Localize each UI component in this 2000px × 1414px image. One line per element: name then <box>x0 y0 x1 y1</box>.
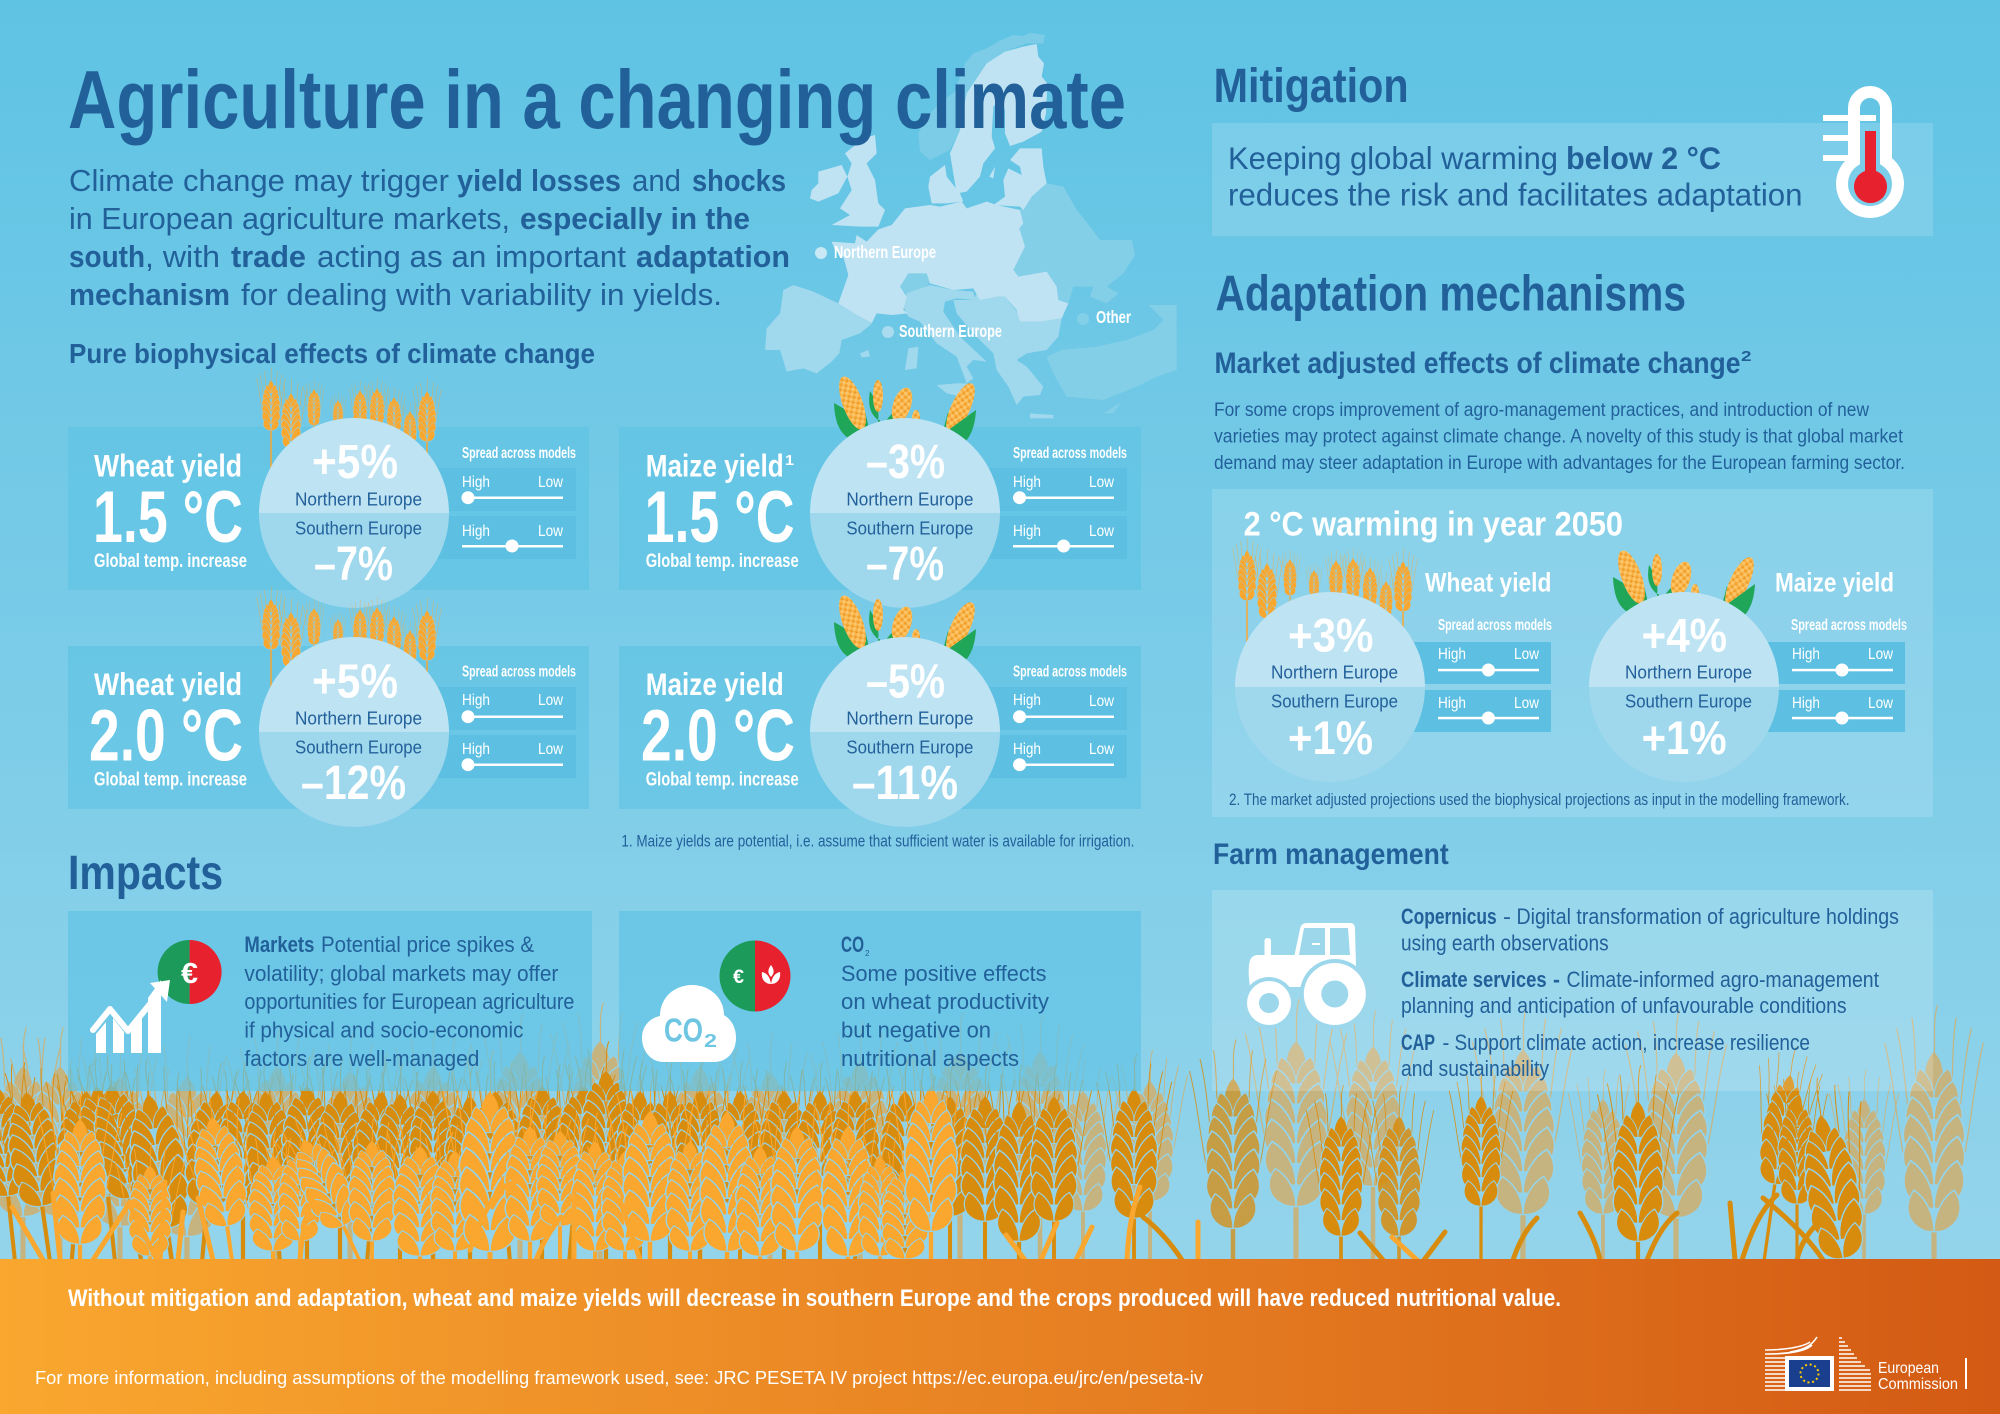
panel: wheat yield 1.5 C: Global temp. increase <box>94 551 247 572</box>
icon: rising chart arrow <box>93 980 170 1053</box>
spread across models <box>400 664 576 778</box>
European Commission logo: Commission <box>1878 1376 1958 1393</box>
icon: thermometer <box>1823 92 1898 212</box>
text: markets: factors are well-managed <box>244 1046 479 1071</box>
icon: wheat crown <box>1232 538 1418 690</box>
circle: north and south values <box>259 418 449 608</box>
intro paragraph: especially in the <box>520 201 750 236</box>
spread across models: wheat: Low <box>1514 646 1540 663</box>
map labels: Southern Europe <box>899 321 1002 341</box>
back row of pale wheat <box>0 999 1983 1414</box>
map: northern Europe <box>810 44 1068 323</box>
spread across models: High <box>462 474 490 491</box>
spread across models <box>950 664 1127 778</box>
spread across models: Low <box>1089 474 1115 491</box>
spread across models <box>950 445 1127 559</box>
circle: maize values: +1% <box>1642 712 1727 765</box>
heading: market adjusted effects: Market adjusted effects of climate change <box>1214 347 1740 380</box>
icon: tractor <box>1243 923 1370 1029</box>
intro paragraph: in European agriculture markets, <box>69 201 510 236</box>
spread across models: wheat: High <box>1438 646 1466 663</box>
heading: impacts: Impacts <box>68 847 223 900</box>
panel: 2 C warming in year 2050: 2 °C warming in year 2050 <box>1244 506 1623 544</box>
footnote 1: 1. Maize yields are potential, i.e. assume that sufficient water is available for irrigation. <box>621 832 1134 851</box>
more information text: For more information, including assumptions of the modelling framework used, see: JRC PESETA IV project https://ec.europa.eu/jrc/en/peseta-iv <box>35 1367 1204 1388</box>
panel: maize yield 1.5 C: Global temp. increase <box>646 551 799 572</box>
text: CO2: CO <box>841 932 864 957</box>
panel: maize yield 1.5 C <box>619 373 1141 608</box>
panel: maize yield 1.5 C: 1.5 °C <box>645 475 795 558</box>
circle: north and south values: +5% <box>312 436 398 489</box>
panel: wheat yield 1.5 C: 1.5 °C <box>93 475 243 558</box>
footnote 2: 2. The market adjusted projections used the biophysical projections as input in the modelling framework. <box>1229 790 1850 809</box>
circle: north and south values: Southern Europe <box>846 737 973 758</box>
panel: wheat yield 1.5 C <box>68 368 589 608</box>
circle: north and south values <box>259 637 449 827</box>
text: farm management measures: Support climate action, increase resilience <box>1454 1030 1810 1055</box>
spread across models: High <box>1013 474 1041 491</box>
circle: north and south values: –7% <box>866 538 944 591</box>
heading: market adjusted effects: 2 <box>1741 348 1752 365</box>
circle: wheat values: Northern Europe <box>1271 662 1398 683</box>
spread across models: Spread across models <box>462 664 576 681</box>
circle: north and south values: Northern Europe <box>846 489 973 510</box>
text: CO2: but negative on <box>841 1018 991 1043</box>
spread across models: maize: Spread across models <box>1791 617 1907 634</box>
panel: wheat yield 2.0 C: Global temp. increase <box>94 770 247 791</box>
circle: wheat values: +3% <box>1288 610 1374 663</box>
icon: wheat crown <box>256 368 442 520</box>
text: markets: Markets <box>244 932 314 957</box>
spread across models: Low <box>1089 523 1115 540</box>
intro paragraph: mechanism <box>69 277 230 312</box>
intro paragraph <box>69 163 790 312</box>
panel: wheat yield 1.5 C: Wheat yield <box>94 448 242 484</box>
text: CO2: on wheat productivity <box>841 989 1049 1014</box>
panel: CO2 <box>619 911 1141 1091</box>
European Commission logo <box>1765 1337 1967 1393</box>
circle: maize values: Northern Europe <box>1625 662 1752 683</box>
panel: maize yield 1.5 C: Maize yield <box>646 448 784 484</box>
spread across models: maize: High <box>1792 695 1820 712</box>
spread across models: High <box>462 692 490 709</box>
icon: maize crown <box>834 373 981 443</box>
circle: north and south values: Southern Europe <box>295 737 422 758</box>
circle: north and south values <box>810 637 1000 827</box>
circle: wheat values: +1% <box>1288 712 1373 765</box>
circle: north and south values: –7% <box>314 538 393 591</box>
intro paragraph: adaptation <box>636 239 790 274</box>
text: CO2: nutritional aspects <box>841 1046 1019 1071</box>
spread across models: Spread across models <box>1013 445 1127 462</box>
spread across models: Low <box>538 692 564 709</box>
map labels: Northern Europe <box>834 242 936 262</box>
map labels <box>815 242 1131 341</box>
intro paragraph: yield losses <box>457 163 621 198</box>
circle: north and south values: Northern Europe <box>295 489 422 510</box>
thick stalks <box>12 1180 1825 1260</box>
text: CO2 <box>841 932 1049 1071</box>
spread across models: Low <box>538 474 564 491</box>
title: Agriculture in a changing climate <box>68 53 1126 146</box>
map labels: Other <box>1096 307 1131 327</box>
paragraph: market adjusted <box>1214 399 1905 474</box>
circle: maize values: +4% <box>1642 610 1727 663</box>
orange bottom band <box>0 1259 2000 1414</box>
circle: north and south values: +5% <box>312 656 398 709</box>
map of Europe <box>765 33 1177 418</box>
text: markets: volatility; global markets may offer <box>244 961 558 986</box>
text: farm management measures: - <box>1442 1030 1449 1055</box>
map: southern Europe <box>765 285 1062 418</box>
panel: maize yield 2.0 C: 2.0 °C <box>641 694 795 777</box>
circle: north and south values: Southern Europe <box>846 518 973 539</box>
panel: maize yield 1.5 C: 1 <box>785 452 794 469</box>
panel: wheat yield 2.0 C: 2.0 °C <box>89 694 243 777</box>
icon: CO2 cloud <box>642 985 736 1062</box>
circle: north and south values: –3% <box>866 436 945 489</box>
spread across models: Low <box>1089 741 1115 758</box>
spread across models: wheat: Low <box>1514 695 1540 712</box>
icon: euro and plant disc: € <box>733 967 744 988</box>
intro paragraph: , with <box>145 239 220 274</box>
intro paragraph: south <box>69 239 145 274</box>
icon: maize crown <box>834 592 981 662</box>
spread across models: High <box>1013 692 1041 709</box>
text: CO2: Some positive effects <box>841 961 1046 986</box>
spread across models: maize: Low <box>1868 646 1894 663</box>
spread across models: wheat: High <box>1438 695 1466 712</box>
spread across models: wheat: Spread across models <box>1438 617 1552 634</box>
headings: yields: Wheat yield <box>1425 568 1551 598</box>
spread across models: High <box>1013 741 1041 758</box>
spread across models: Low <box>1089 693 1115 710</box>
headings: yields <box>1425 568 1894 598</box>
circle: north and south values: –12% <box>301 757 406 810</box>
circle: north and south values: Northern Europe <box>295 708 422 729</box>
text: farm management measures: - <box>1553 967 1560 992</box>
spread across models: maize: High <box>1792 646 1820 663</box>
text: farm management measures: planning and anticipation of unfavourable conditions <box>1401 993 1847 1018</box>
text: markets: Potential price spikes & <box>321 932 534 957</box>
panel: maize yield 2.0 C: Maize yield <box>646 666 784 702</box>
text: markets: opportunities for European agriculture <box>244 989 574 1014</box>
circle: wheat values: Southern Europe <box>1271 691 1398 712</box>
spread across models: High <box>1013 523 1041 540</box>
panel: maize yield 2.0 C: Global temp. increase <box>646 770 799 791</box>
front row of light wheat <box>38 1049 973 1414</box>
panel: farm management <box>1212 890 1933 1091</box>
paragraph: market adjusted: demand may steer adaptation in Europe with advantages for the European farming sector. <box>1214 452 1905 474</box>
icon: wheat crown <box>256 586 442 738</box>
panel: wheat yield 2.0 C <box>68 586 589 827</box>
spread across models: High <box>462 741 490 758</box>
spread across models: wheat <box>1380 617 1552 732</box>
icon: euro disc: € <box>181 958 198 990</box>
intro paragraph: shocks <box>692 163 786 198</box>
text: farm management measures <box>1401 904 1899 1081</box>
text: CO2: 2 <box>865 949 870 958</box>
intro paragraph: trade <box>231 239 306 274</box>
circle: north and south values: –5% <box>866 656 945 709</box>
intro paragraph: for dealing with variability in yields. <box>241 277 722 312</box>
panel: mitigation <box>1212 92 1933 236</box>
headings: yields: Maize yield <box>1775 568 1894 598</box>
wheat field <box>0 999 1983 1414</box>
spread across models: Low <box>538 523 564 540</box>
European Commission logo: European <box>1878 1360 1939 1377</box>
circle: maize values <box>1589 592 1779 782</box>
panel: maize yield 2.0 C <box>619 592 1141 827</box>
text: farm management measures: and sustainability <box>1401 1056 1549 1081</box>
text: farm management measures: Climate-informed agro-management <box>1566 967 1879 992</box>
spread across models: maize <box>1734 617 1907 732</box>
paragraph: market adjusted: For some crops improvement of agro-management practices, and introduction of new <box>1214 399 1870 421</box>
circle: wheat values <box>1235 592 1425 782</box>
text: markets: if physical and socio-economic <box>244 1018 523 1043</box>
conclusion text: Without mitigation and adaptation, wheat and maize yields will decrease in southern Europe and the crops produced will have reduced nutritional value. <box>68 1285 1561 1312</box>
intro paragraph: Climate change may trigger <box>69 163 449 198</box>
panel: mitigation: reduces the risk and facilitates adaptation <box>1228 177 1802 213</box>
text: farm management measures: Climate services <box>1401 967 1547 992</box>
text: farm management measures: using earth observations <box>1401 931 1609 956</box>
middle row of dark wheat <box>0 1040 1914 1414</box>
spread across models: maize: Low <box>1868 695 1894 712</box>
circle: north and south values: Northern Europe <box>846 708 973 729</box>
icon: CO2 cloud: 2 <box>704 1031 717 1051</box>
spread across models <box>400 445 576 559</box>
panel: markets <box>68 911 592 1091</box>
circle: north and south values: –11% <box>852 757 958 810</box>
icon: maize crown <box>1613 547 1760 617</box>
paragraph: market adjusted: varieties may protect against climate change. A novelty of this study is that global market <box>1214 426 1904 448</box>
circle: maize values: Southern Europe <box>1625 691 1752 712</box>
intro paragraph: and <box>632 163 681 198</box>
spread across models: Low <box>538 741 564 758</box>
heading: farm management: Farm management <box>1213 838 1449 871</box>
circle: north and south values: Southern Europe <box>295 518 422 539</box>
heading: pure biophysical effects: Pure biophysical effects of climate change <box>69 338 595 369</box>
intro paragraph: acting as an important <box>317 239 626 274</box>
panel: wheat yield 2.0 C: Wheat yield <box>94 666 242 702</box>
spread across models: High <box>462 523 490 540</box>
heading: adaptation mechanisms: Adaptation mechanisms <box>1216 266 1686 322</box>
map: other countries <box>900 33 1177 413</box>
icon: CO2 cloud: CO <box>664 1012 703 1049</box>
icon: euro disc <box>158 940 222 1004</box>
spread across models: Spread across models <box>1013 664 1127 681</box>
icon: euro and plant disc <box>720 940 790 1012</box>
heading: mitigation: Mitigation <box>1214 60 1409 113</box>
text: farm management measures: CAP <box>1401 1030 1435 1055</box>
circle: north and south values <box>810 418 1000 608</box>
text: farm management measures: Copernicus <box>1401 904 1497 929</box>
panel: mitigation: Keeping global warming <box>1228 140 1558 176</box>
panel: 2 C warming in year 2050 <box>1212 489 1933 817</box>
panel: mitigation: below 2 °C <box>1566 140 1721 176</box>
text: farm management measures: Digital transformation of agriculture holdings <box>1516 904 1899 929</box>
spread across models: Spread across models <box>462 445 576 462</box>
text: farm management measures: - <box>1503 904 1511 929</box>
text: markets <box>244 932 574 1071</box>
